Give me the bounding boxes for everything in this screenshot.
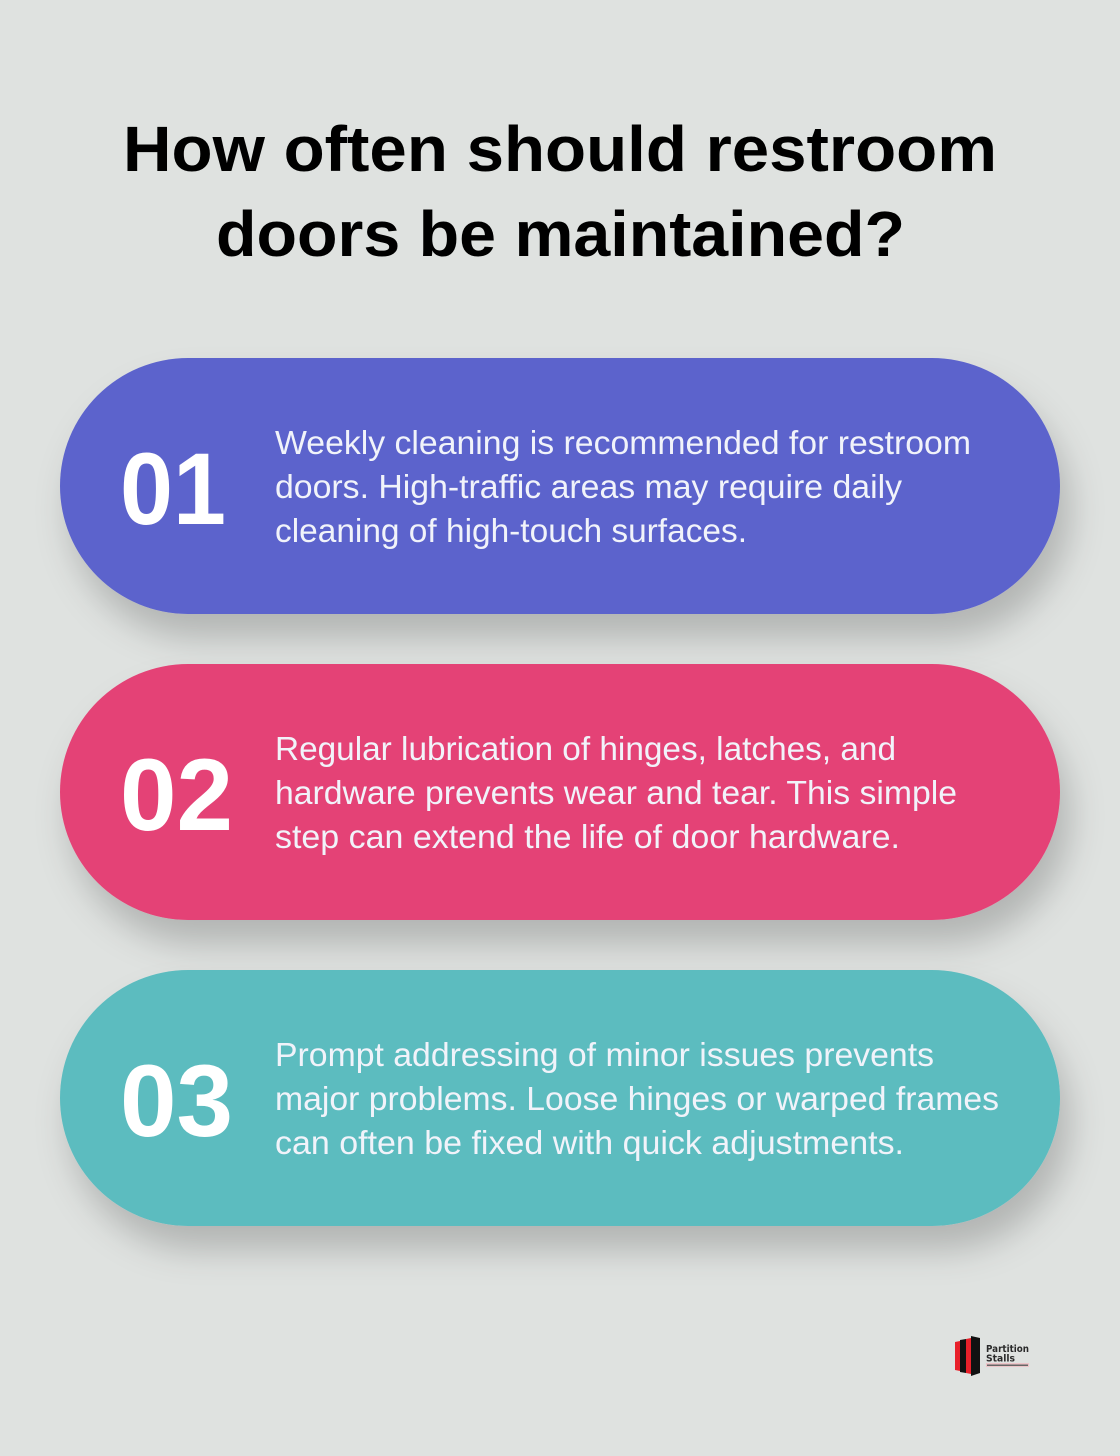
title: How often should restroom (123, 113, 997, 185)
text block: step 03 (275, 1036, 999, 1161)
text block: step 02: Regular lubrication of hinges, latches, and (275, 730, 896, 767)
logo wordmark (986, 1344, 1029, 1367)
panel: step 03 minor issues (60, 970, 1060, 1226)
title: doors be maintained? (216, 198, 905, 270)
logo wordmark: Partition (986, 1344, 1029, 1355)
pill background: pink (60, 664, 1060, 920)
number 02: 02 (120, 738, 233, 852)
text block: step 01: cleaning of high-touch surfaces. (275, 512, 747, 549)
text block: step 02 (275, 730, 957, 855)
text block: step 02: step can extend the life of door hardware. (275, 818, 900, 855)
text block: step 03: major problems. Loose hinges or warped frames (275, 1080, 999, 1117)
text block: step 01: Weekly cleaning is recommended for restroom (275, 424, 971, 461)
title (123, 113, 997, 270)
text block: step 01 (275, 424, 971, 549)
text block: step 02: hardware prevents wear and tear. This simple (275, 774, 957, 811)
text block: step 01: doors. High-traffic areas may require daily (275, 468, 903, 505)
logo: Partition Stalls (955, 1336, 1029, 1376)
panel: step 01 weekly cleaning (60, 358, 1060, 614)
text block: step 03: can often be fixed with quick adjustments. (275, 1124, 904, 1161)
number 01: 01 (120, 432, 226, 546)
number 03: 03 (120, 1044, 233, 1158)
logo wordmark: Stalls (986, 1354, 1015, 1364)
text block: step 03: Prompt addressing of minor issues prevents (275, 1036, 934, 1073)
pill background: teal (60, 970, 1060, 1226)
icon: door panels (955, 1336, 980, 1376)
panel: step 02 lubrication (60, 664, 1060, 920)
pill background: blue (60, 358, 1060, 614)
